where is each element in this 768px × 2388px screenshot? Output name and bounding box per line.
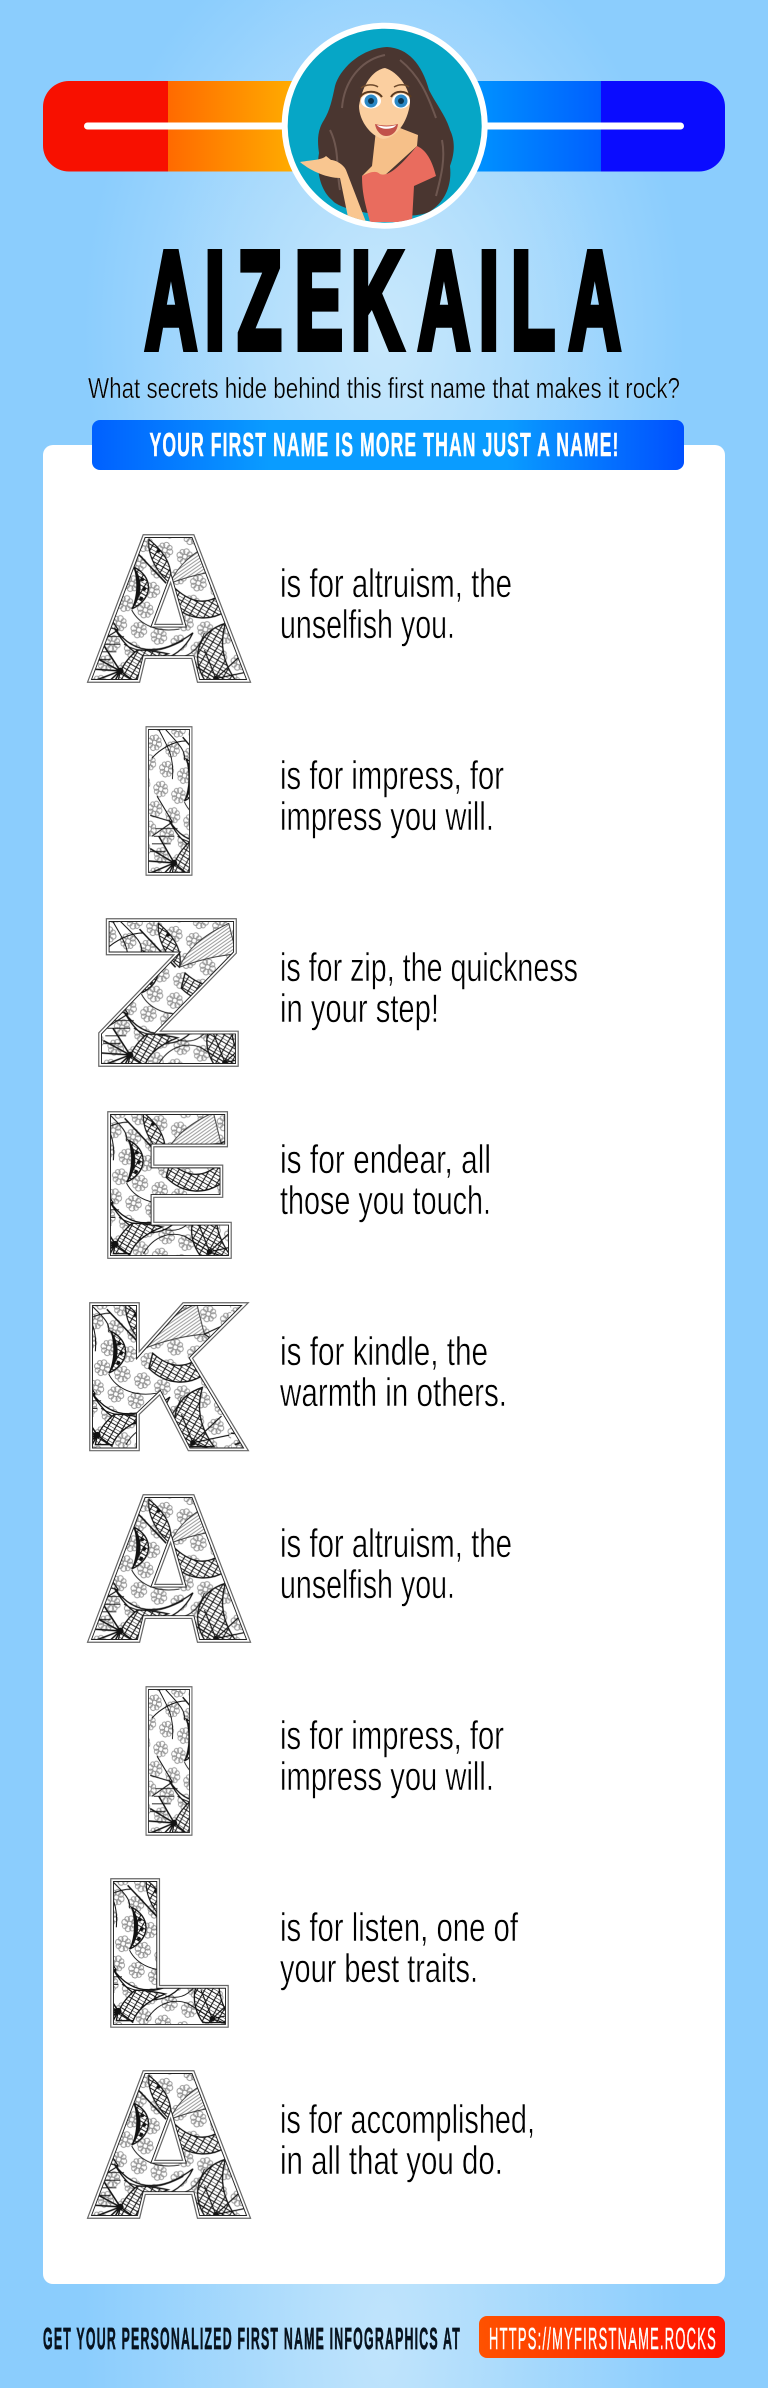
row: Z zip bbox=[102, 922, 578, 1063]
row: A altruism repeat bbox=[92, 1498, 512, 1639]
text: impress repeat: is for impress, for bbox=[280, 1714, 504, 1758]
text: impress bbox=[280, 754, 504, 839]
row: A altruism bbox=[92, 538, 512, 679]
text: kindle: is for kindle, the bbox=[280, 1330, 488, 1374]
letter: E bbox=[110, 1114, 229, 1256]
text: accomplished: in all that you do. bbox=[280, 2139, 503, 2183]
text: endear: those you touch. bbox=[280, 1179, 491, 1223]
text: kindle bbox=[279, 1330, 507, 1415]
text: impress repeat: impress you will. bbox=[280, 1755, 494, 1799]
header bar bbox=[43, 81, 725, 172]
text: endear bbox=[280, 1138, 491, 1223]
text: listen: your best traits. bbox=[280, 1947, 478, 1991]
text: zip bbox=[280, 946, 578, 1031]
bar: light blue segment bbox=[470, 81, 601, 172]
mouth bbox=[375, 124, 398, 136]
white line bbox=[84, 122, 684, 130]
letter: K bbox=[92, 1306, 244, 1448]
row: A accomplished bbox=[92, 2074, 535, 2215]
text: listen bbox=[280, 1906, 519, 1991]
letter: A bbox=[92, 1498, 247, 1639]
text: impress repeat bbox=[280, 1714, 504, 1799]
text: kindle: warmth in others. bbox=[279, 1371, 507, 1415]
hair strands bbox=[330, 55, 443, 196]
face bbox=[359, 68, 410, 139]
text: zip: in your step! bbox=[280, 987, 439, 1031]
letter: Z bbox=[102, 922, 235, 1063]
text: altruism: unselfish you. bbox=[280, 603, 455, 647]
text: altruism: is for altruism, the bbox=[280, 562, 512, 606]
row: E endear bbox=[110, 1114, 491, 1256]
row: L listen bbox=[114, 1882, 519, 2024]
row: K kindle bbox=[92, 1306, 507, 1448]
text: altruism repeat: is for altruism, the bbox=[280, 1522, 512, 1566]
bar: red segment bbox=[43, 81, 168, 172]
text: zip: is for zip, the quickness bbox=[280, 946, 578, 990]
bar: dark blue segment bbox=[601, 81, 725, 172]
text: impress: impress you will. bbox=[280, 795, 494, 839]
text: accomplished: is for accomplished, bbox=[280, 2098, 535, 2142]
shirt bbox=[362, 146, 436, 222]
row: I impress repeat bbox=[148, 1690, 504, 1832]
letter: L bbox=[114, 1882, 225, 2024]
letter: A bbox=[92, 538, 247, 679]
banner bbox=[92, 420, 684, 470]
row: I impress bbox=[148, 730, 504, 872]
text: altruism bbox=[280, 562, 512, 647]
text: listen: is for listen, one of bbox=[280, 1906, 519, 1950]
title: AIZEKAILA bbox=[145, 224, 621, 378]
hair bbox=[318, 47, 454, 216]
letter: A bbox=[92, 2074, 247, 2215]
card panel bbox=[43, 445, 725, 2284]
text: impress: is for impress, for bbox=[280, 754, 504, 798]
footer link button bbox=[479, 2316, 725, 2358]
text: endear: is for endear, all bbox=[280, 1138, 491, 1182]
text: accomplished bbox=[280, 2098, 535, 2183]
bar: orange segment bbox=[168, 81, 298, 172]
neck and chest bbox=[362, 128, 418, 176]
letter: I bbox=[148, 1690, 189, 1832]
portrait circle bbox=[285, 26, 485, 226]
letter: I bbox=[148, 730, 189, 872]
text: altruism repeat bbox=[280, 1522, 512, 1607]
arm and hand bbox=[300, 156, 366, 222]
eyes bbox=[360, 85, 411, 108]
text: altruism repeat: unselfish you. bbox=[280, 1563, 455, 1607]
